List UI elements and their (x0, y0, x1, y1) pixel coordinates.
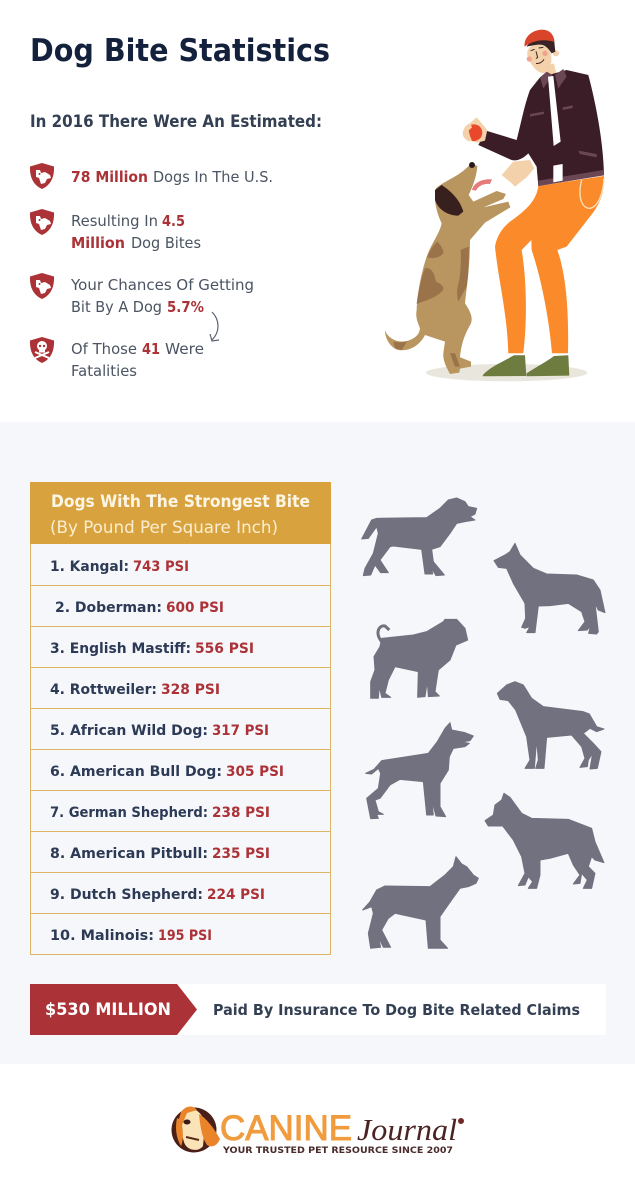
row 4 (50, 682, 220, 698)
row 7: 238 PSI (212, 805, 270, 821)
dog: tongue (472, 179, 492, 191)
table header (30, 482, 331, 544)
row 5: 5. African Wild Dog: (50, 723, 208, 739)
stat: 78 million dogs: 78 Million (71, 168, 148, 186)
dog: spots (393, 242, 469, 367)
man: jacket (478, 70, 604, 186)
logo: hound head icon (172, 1106, 220, 1152)
row 3: 3. English Mastiff: (50, 641, 191, 657)
callout description: Paid By Insurance To Dog Bite Related Claims (213, 1001, 580, 1019)
row 7: 7. German Shepherd: (50, 805, 208, 821)
dog: nose (469, 162, 475, 168)
row 5: 317 PSI (212, 723, 269, 739)
man: trouser chain (580, 178, 604, 208)
stat: chances of getting bit: Bit By A Dog (71, 298, 162, 316)
stat: 41 fatalities: 41 (142, 340, 160, 358)
stat: chances of getting bit: Your Chances Of Getting (70, 276, 254, 294)
title: Dog Bite Statistics (30, 33, 330, 69)
row 1: 743 PSI (133, 559, 189, 575)
man: eyes and smile (531, 47, 544, 63)
man: neck (543, 63, 557, 82)
man: wrist and palm (467, 117, 487, 143)
row 1: 1. Kangal: (50, 559, 129, 575)
man: cheeks (527, 51, 548, 62)
icon: dog shield 1 (30, 163, 54, 189)
man: ear (553, 50, 559, 56)
stat: chances of getting bit (70, 276, 254, 316)
row 10 (50, 928, 212, 944)
stat: 4.5 million bites: Resulting In (71, 212, 158, 230)
row 1 (50, 559, 189, 575)
dog silhouette 3 (371, 619, 468, 698)
row 8: 8. American Pitbull: (50, 846, 208, 862)
stat: 4.5 million bites: 4.5 (162, 212, 185, 230)
row 4: 328 PSI (161, 682, 220, 698)
table rows frame (30, 544, 331, 954)
dog silhouette 7 (363, 857, 478, 948)
row 2: 2. Doberman: (55, 600, 162, 616)
row 10: 195 PSI (158, 928, 212, 944)
ground shadow (426, 364, 587, 381)
man: face (527, 42, 551, 73)
ball (466, 124, 482, 141)
stat: 4.5 million bites: Dog Bites (131, 234, 201, 252)
stat: 41 fatalities (71, 340, 204, 380)
dog silhouette 5 (366, 723, 473, 819)
dog: ear (435, 185, 463, 216)
stat: 41 fatalities: Fatalities (71, 362, 137, 380)
row 4: 4. Rottweiler: (50, 682, 157, 698)
icon: skull shield (30, 337, 54, 363)
icon: dog shield 3 (30, 273, 54, 299)
callout amount: $530 MILLION (45, 1000, 171, 1020)
man: fingers (463, 124, 472, 141)
header line 1: Dogs With The Strongest Bite (51, 492, 310, 511)
panel: statistics list (30, 163, 273, 380)
row 9: 224 PSI (207, 887, 265, 903)
stat: 4.5 million bites: Million (71, 234, 125, 252)
logo: Canine Journal (172, 1106, 464, 1156)
stat: chances of getting bit: 5.7% (167, 298, 204, 316)
logo: registered dot (458, 1118, 464, 1124)
stat: 41 fatalities: Of Those (71, 340, 137, 358)
row 2: 600 PSI (166, 600, 224, 616)
man: open hand (502, 160, 534, 187)
dog: body (385, 163, 510, 374)
man: shoes (483, 355, 569, 376)
dog silhouette 6 (485, 793, 604, 888)
row 9: 9. Dutch Shepherd: (50, 887, 203, 903)
callout: insurance claims (30, 984, 606, 1035)
icon: dog shield 2 (30, 209, 54, 235)
man: jacket collar and hem (530, 69, 604, 186)
header line 2: (By Pound Per Square Inch) (50, 518, 278, 537)
logo: CANINE wordmark: CANINE (220, 1109, 352, 1148)
icon: dog silhouette group (362, 498, 605, 948)
dog silhouette 2 (494, 543, 605, 634)
man: trousers (495, 176, 604, 353)
logo: tagline: YOUR TRUSTED PET RESOURCE SINCE 2007 (222, 1146, 453, 1156)
callout red arrow tag (30, 984, 197, 1035)
panel: lower section background (0, 422, 635, 1064)
stat: 4.5 million bites (71, 212, 201, 252)
illustration: man playing with dog (385, 30, 604, 381)
subtitle: In 2016 There Were An Estimated: (30, 112, 322, 132)
row 10: 10. Malinois: (50, 928, 154, 944)
logo: Journal script: Journal (357, 1112, 457, 1147)
callout background (30, 984, 606, 1035)
row 6: 305 PSI (226, 764, 284, 780)
man: beanie (525, 30, 554, 47)
table: strongest bite (30, 482, 331, 954)
row 2 (55, 600, 224, 616)
arrow: curved down (210, 312, 219, 341)
stat: 41 fatalities: Were (165, 340, 204, 358)
row 3: 556 PSI (195, 641, 254, 657)
man: hair (527, 37, 555, 53)
row 6: 6. American Bull Dog: (50, 764, 222, 780)
dog silhouette 4 (497, 682, 604, 769)
dog silhouette 1 (362, 498, 477, 576)
stat: 78 million dogs: Dogs In The U.S. (153, 168, 273, 186)
row 8: 235 PSI (212, 846, 270, 862)
man: white shirt (548, 76, 563, 182)
stat: 78 million dogs (71, 168, 273, 186)
